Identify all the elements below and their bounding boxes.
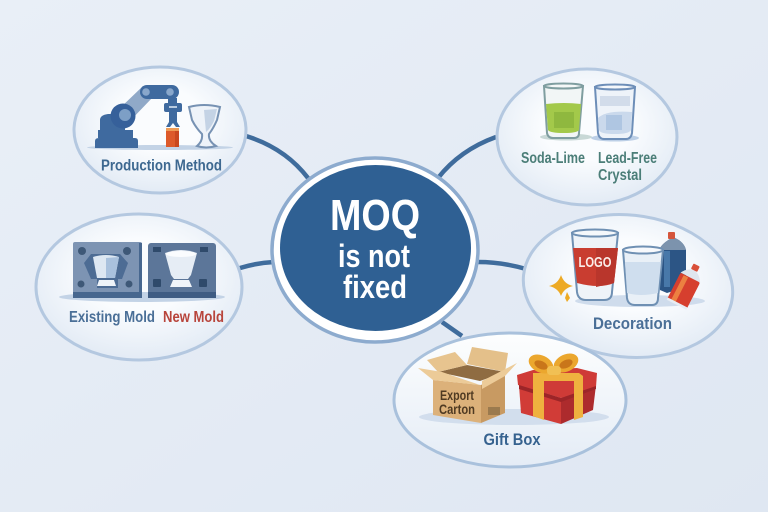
icon: soda-lime glass	[540, 84, 592, 140]
panel: packaging	[394, 333, 626, 467]
panel: glass material	[497, 69, 677, 205]
hub line: fixed: fixed	[343, 269, 407, 305]
icon: logo glass	[572, 230, 618, 300]
label: new mold: New Mold	[163, 309, 224, 326]
central hub: MOQ is not fixed	[272, 158, 478, 342]
hub title: MOQ	[330, 191, 420, 240]
icon: spray can blue	[659, 232, 686, 293]
label: gift box: Gift Box	[484, 430, 541, 449]
label: lead-free crystal: Crystal	[598, 167, 642, 184]
label: production method: Production Method	[101, 158, 222, 174]
icon: existing mold	[73, 242, 142, 298]
label: existing mold: Existing Mold	[69, 309, 155, 326]
label: lead-free crystal	[598, 150, 657, 184]
icon: export carton	[418, 347, 517, 423]
icon: gift box	[517, 350, 597, 424]
carton text line: Export: Export	[440, 388, 474, 403]
icon: robot arm	[87, 85, 233, 150]
panel: mold type	[36, 214, 242, 360]
label: soda-lime: Soda-Lime	[521, 150, 585, 167]
panel: production method	[74, 67, 246, 193]
glass logo text: LOGO	[578, 255, 612, 271]
carton text line: Carton: Carton	[439, 402, 475, 417]
icon: sparkle	[549, 275, 573, 302]
icon: lead-free crystal glass	[591, 84, 639, 142]
icon: clear glass	[623, 246, 663, 305]
connector lines	[240, 136, 526, 336]
label: decoration: Decoration	[593, 314, 672, 333]
panel: decoration	[516, 204, 740, 368]
icon: spray can red	[667, 260, 707, 310]
label: lead-free crystal: Lead-Free	[598, 150, 657, 167]
icon: new mold	[148, 243, 216, 298]
hub line: is not: is not	[338, 238, 410, 274]
icon: goblet	[189, 105, 220, 148]
icon: orange glass	[166, 128, 179, 147]
